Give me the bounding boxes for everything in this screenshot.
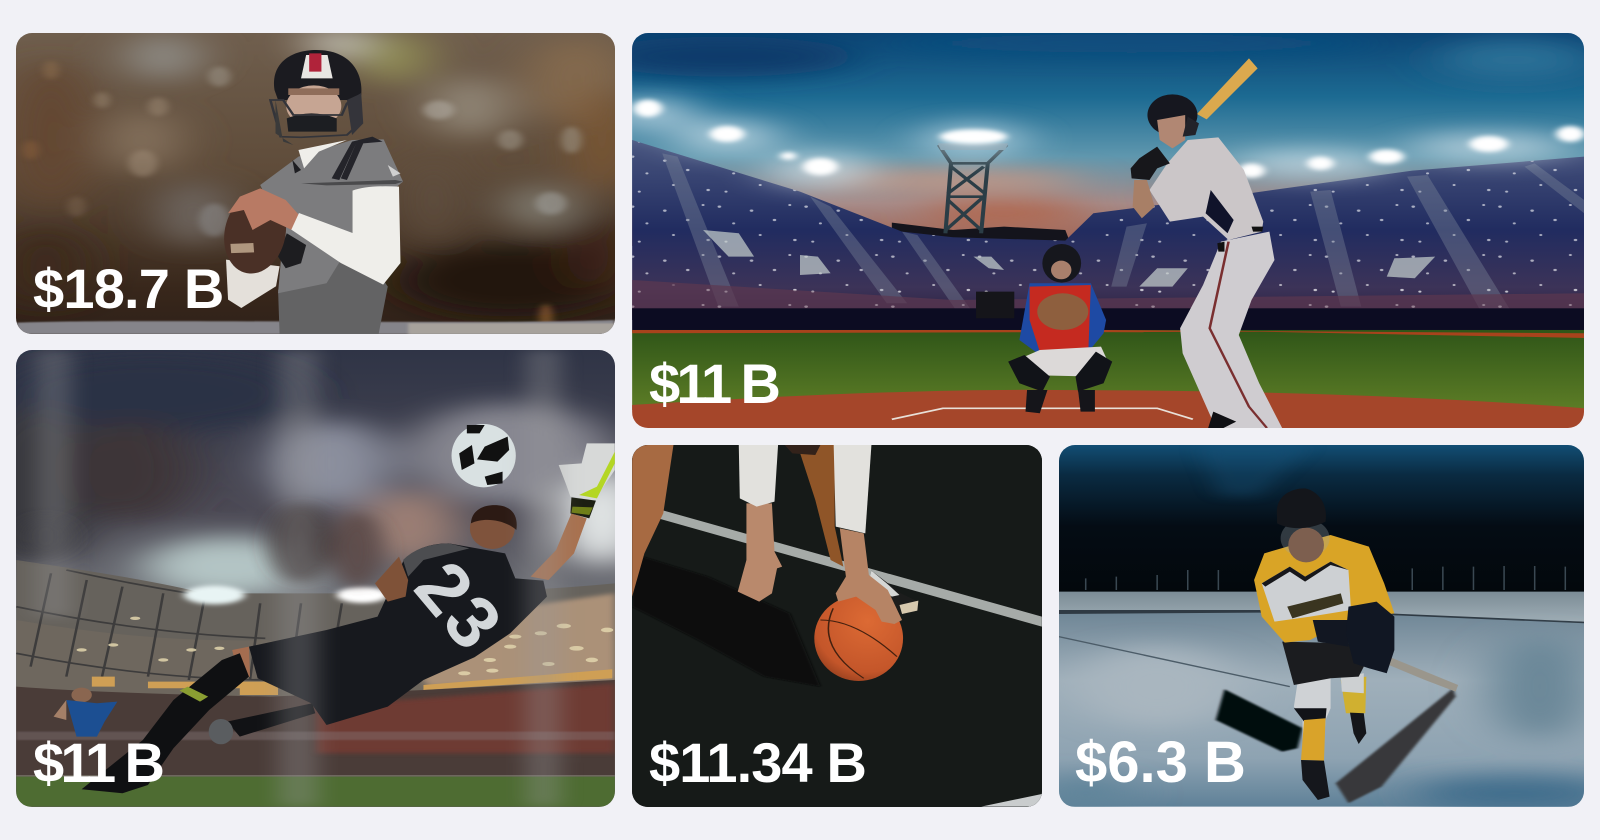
floodlight glow — [602, 97, 1570, 187]
panel: soccer $11 B — [16, 350, 615, 807]
panel: basketball $11.34 B — [632, 445, 1042, 807]
lower crowd band — [632, 280, 1584, 317]
puck — [1216, 689, 1303, 752]
player: left forearm sleeve — [226, 260, 280, 308]
stadium stands — [16, 560, 615, 777]
skater: back leg and skate — [1341, 677, 1366, 713]
jersey number: 23 — [399, 546, 520, 667]
photo: quarterback — [16, 33, 615, 334]
catcher — [1008, 244, 1112, 413]
grass — [632, 330, 1584, 410]
left leg — [632, 445, 673, 597]
stand light strip — [92, 669, 612, 695]
stands — [632, 140, 1584, 320]
hockey stick blade — [1336, 688, 1456, 803]
value: $11 B: $11 B — [33, 731, 163, 794]
goalkeeper: glove — [559, 443, 615, 500]
arm and hand on ball — [836, 528, 902, 624]
stadium fog background — [0, 353, 648, 597]
panel: football $18.7 B — [16, 33, 615, 334]
photo: hockey player — [1059, 445, 1584, 807]
infield dirt — [632, 390, 1584, 428]
batter: pants — [1180, 232, 1282, 428]
value: $18.7 B: $18.7 B — [33, 257, 224, 320]
pitch — [16, 777, 615, 807]
photo: basketball on court — [632, 445, 1042, 807]
floodlights — [634, 100, 1585, 178]
boards — [1059, 592, 1584, 622]
white shorts right — [834, 445, 871, 533]
hands — [228, 188, 299, 231]
goalkeeper: knee — [232, 647, 250, 680]
stadium base wall — [632, 308, 1584, 332]
ground strip — [16, 320, 615, 334]
player: pants — [278, 240, 388, 334]
background player — [54, 688, 117, 737]
player: jersey — [260, 139, 403, 293]
blurred forest background — [5, 27, 628, 317]
dark smoke columns — [20, 503, 383, 587]
goalkeeper: shorts and jersey — [249, 543, 547, 725]
value: $11.34 B: $11.34 B — [649, 731, 866, 794]
skater: front leg — [1294, 678, 1331, 760]
goalkeeper: raised arm — [531, 513, 587, 580]
panel: hockey $6.3 B — [1059, 445, 1584, 807]
home plate lines — [892, 408, 1193, 419]
sky — [632, 33, 1584, 246]
soccer ball — [452, 424, 516, 487]
shoe — [869, 571, 918, 614]
batter: forearm — [1133, 180, 1155, 218]
skater: gloves — [1313, 620, 1348, 647]
light tower — [939, 145, 1007, 233]
vertical goal net bars — [36, 350, 561, 807]
jersey shoulder stripes — [332, 137, 383, 180]
stand white tents — [703, 230, 1435, 287]
court line — [652, 507, 1042, 627]
court shadow — [632, 553, 820, 687]
value: $11 B: $11 B — [649, 352, 779, 415]
basketball — [814, 596, 903, 681]
skater: helmet and face — [1281, 519, 1330, 558]
stand aisles — [662, 153, 1584, 317]
value: $6.3 B: $6.3 B — [1075, 730, 1246, 795]
arm and fingers left — [738, 503, 782, 602]
hockey stick shaft — [1369, 650, 1458, 692]
floodlights — [184, 586, 388, 604]
stand arcs — [16, 570, 342, 680]
white shorts left — [739, 445, 778, 507]
far leg behind — [797, 445, 843, 567]
tree line — [892, 223, 1070, 243]
ice — [1059, 613, 1584, 807]
helmet — [274, 50, 361, 100]
football — [219, 191, 291, 275]
batter: helmet and face — [1147, 94, 1197, 136]
photo: goalkeeper — [16, 350, 615, 807]
baseball bat — [1197, 58, 1258, 119]
court corner — [981, 794, 1042, 807]
photo: batter and catcher — [632, 33, 1584, 428]
panel: baseball $11 B — [632, 33, 1584, 428]
batter: jersey — [1149, 137, 1263, 240]
skater: shorts — [1282, 642, 1364, 685]
bokeh highlights — [22, 61, 582, 329]
arena dark backdrop — [1055, 445, 1586, 593]
goalkeeper: front leg — [82, 653, 249, 793]
batter: gloves — [1131, 147, 1170, 180]
fence posts — [1086, 566, 1565, 590]
stadium lamps — [77, 617, 613, 675]
goalkeeper: head — [470, 508, 515, 549]
goalkeeper: bent arm — [375, 557, 408, 602]
lower crowd — [16, 680, 615, 775]
skater: jersey — [1254, 535, 1394, 643]
player: white sleeve — [291, 186, 401, 285]
goalkeeper: back leg — [227, 703, 315, 737]
